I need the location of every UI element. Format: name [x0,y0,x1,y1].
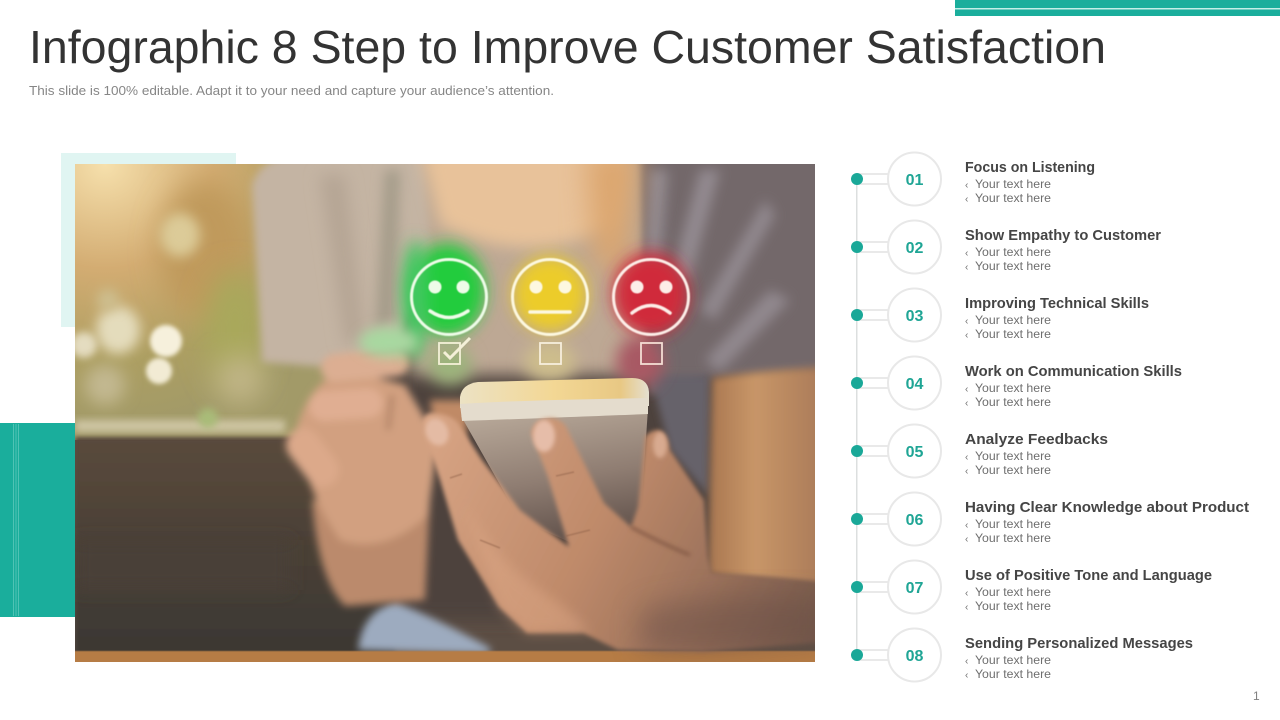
photo: upper arm [708,367,825,590]
photo: left hand [296,362,470,606]
step 05 [851,424,1108,478]
step 05: Your text here [975,449,1051,463]
step 07: Your text here [975,599,1051,613]
step 08: Your text here [975,653,1051,667]
step 03: ‹ [965,316,968,327]
step 05: Your text here [975,463,1051,477]
icon: empty box right [641,343,662,364]
photo: hand holding phone with satisfaction faces [60,150,830,665]
step 07: Use of Positive Tone and Language [965,567,1212,584]
step 03: Improving Technical Skills [965,295,1149,312]
photo background: sunlit bokeh foliage [75,164,329,440]
step 07: 07 [906,580,924,597]
teal accent block [0,423,75,617]
step 02: Your text here [975,259,1051,273]
photo: right hand [421,413,825,652]
icon: empty box middle [540,343,561,364]
step 08: Your text here [975,667,1051,681]
step 03: 03 [906,308,924,325]
icon: checked box [439,338,470,364]
step 03: Your text here [975,327,1051,341]
step 05: 05 [906,444,924,461]
step 02: 02 [906,240,924,257]
step 06: Your text here [975,517,1051,531]
step 06: ‹ [965,534,968,545]
step 01: Focus on Listening [965,159,1095,176]
step 04: Work on Communication Skills [965,363,1182,380]
step 07: ‹ [965,588,968,599]
step 07: Your text here [975,585,1051,599]
step 02 [851,220,1161,274]
step 04 [851,356,1182,410]
step 02: ‹ [965,248,968,259]
step 03 [851,288,1149,342]
step 06: ‹ [965,520,968,531]
step 05: ‹ [965,452,968,463]
step 03: ‹ [965,330,968,341]
icon: sad face [614,260,688,334]
light teal accent square [61,153,236,327]
step 02: ‹ [965,262,968,273]
step 06: Your text here [975,531,1051,545]
step 06: 06 [906,512,924,529]
step 04: 04 [906,376,924,393]
step 02: Show Empathy to Customer [965,227,1161,244]
step 07 [851,560,1212,614]
photo: table edge [75,650,815,662]
step 05: ‹ [965,466,968,477]
photo: jeans [358,602,490,654]
step 01: Your text here [975,177,1051,191]
photo: shirt [252,150,830,620]
subtitle: This slide is 100% editable. Adapt it to your need and capture your audience’s attention. [29,83,554,98]
step 03: Your text here [975,313,1051,327]
step 08: 08 [906,648,924,665]
step 01: Your text here [975,191,1051,205]
photo: glow halos [359,240,689,388]
step 08: ‹ [965,656,968,667]
photo: phone [460,378,649,540]
step 04: ‹ [965,398,968,409]
step 04: ‹ [965,384,968,395]
icon: happy face [412,260,486,334]
page number: 1 [1253,689,1260,703]
step 01 [851,152,1095,206]
step 01: 01 [906,172,924,189]
step 01: ‹ [965,194,968,205]
top right accent bar [955,0,1280,16]
step 07: ‹ [965,602,968,613]
step 01: ‹ [965,180,968,191]
icon: neutral face [512,260,588,334]
step 06: Having Clear Knowledge about Product [965,499,1249,516]
step 08: Sending Personalized Messages [965,635,1193,652]
step 05: Analyze Feedbacks [965,431,1108,448]
step 06 [851,492,1249,546]
step 08 [851,628,1193,682]
step 04: Your text here [975,395,1051,409]
photo background: dark table [75,437,395,662]
timeline spine [856,179,858,655]
title: Infographic 8 Step to Improve Customer Satisfaction [29,21,1106,73]
step 04: Your text here [975,381,1051,395]
step 02: Your text here [975,245,1051,259]
step 08: ‹ [965,670,968,681]
